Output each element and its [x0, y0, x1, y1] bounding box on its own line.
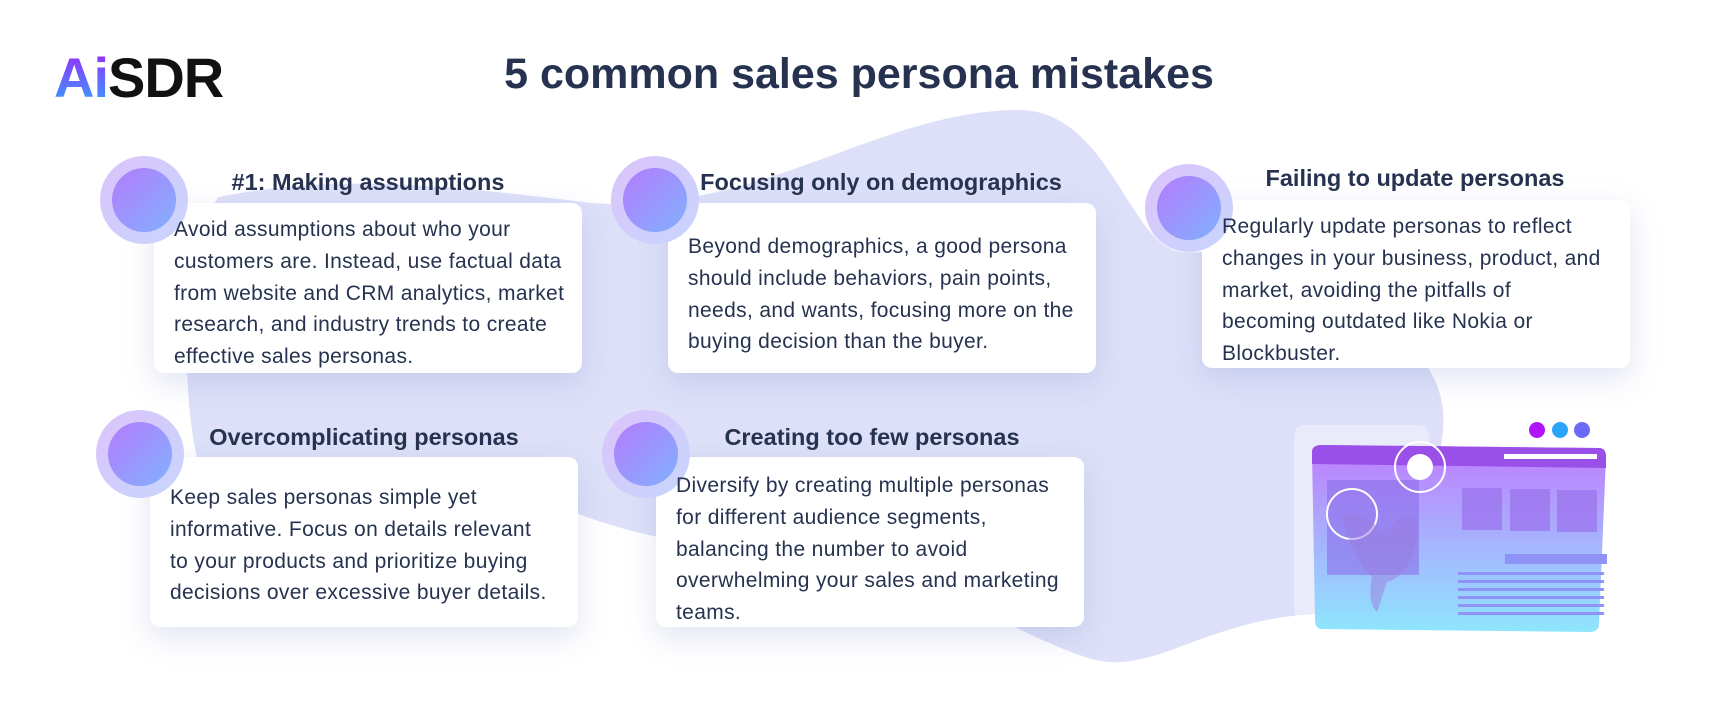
card 4 — [96, 410, 586, 646]
text 2: buying decision than the buyer. — [688, 330, 988, 353]
text 2: Beyond demographics, a good persona — [688, 235, 1067, 258]
text 3: market, avoiding the pitfalls of — [1222, 279, 1511, 302]
text 2: should include behaviors, pain points, — [688, 267, 1052, 290]
card 5 — [602, 410, 1090, 646]
text 4 — [170, 486, 547, 604]
text 2: needs, and wants, focusing more on the — [688, 299, 1074, 322]
card 3 — [1145, 164, 1638, 386]
card 1 — [100, 156, 588, 392]
text 4: Keep sales personas simple yet — [170, 486, 477, 509]
text 3: changes in your business, product, and — [1222, 247, 1601, 270]
text 5: balancing the number to avoid — [676, 538, 968, 561]
text 3: becoming outdated like Nokia or — [1222, 310, 1533, 333]
heading 5: Creating too few personas — [724, 424, 1020, 450]
text 4: informative. Focus on details relevant — [170, 518, 531, 541]
heading 2: Focusing only on demographics — [700, 169, 1062, 195]
icon circle 5 — [602, 410, 690, 498]
card box 4 — [150, 457, 578, 627]
text 1: effective sales personas. — [174, 345, 414, 368]
heading 1: #1: Making assumptions — [232, 169, 504, 195]
icon circle 3 — [1145, 164, 1233, 252]
text 5: teams. — [676, 601, 741, 624]
icon circle 1 — [100, 156, 188, 244]
window dots — [1529, 422, 1590, 438]
text 4: decisions over excessive buyer details. — [170, 581, 547, 604]
text 5 — [676, 474, 1059, 624]
text 3: Blockbuster. — [1222, 342, 1341, 365]
text 1: from website and CRM analytics, market — [174, 282, 564, 305]
icon circle 4 — [96, 410, 184, 498]
text 5: for different audience segments, — [676, 506, 987, 529]
logo: AiSDR — [54, 46, 223, 109]
card box 5 — [656, 457, 1084, 627]
heading 4: Overcomplicating personas — [209, 424, 519, 450]
card box 2 — [668, 203, 1096, 373]
heading 3: Failing to update personas — [1265, 165, 1565, 191]
text 1: research, and industry trends to create — [174, 313, 547, 336]
card box 3 — [1202, 200, 1630, 368]
text 1: Avoid assumptions about who your — [174, 218, 511, 241]
icon circle 2 — [611, 156, 699, 244]
text 1: customers are. Instead, use factual data — [174, 250, 562, 273]
illustration: browser window — [1294, 422, 1607, 632]
text 5: Diversify by creating multiple personas — [676, 474, 1049, 497]
title: 5 common sales persona mistakes — [504, 50, 1214, 98]
text 1 — [174, 218, 564, 368]
text 3: Regularly update personas to reflect — [1222, 215, 1572, 238]
text 3 — [1222, 215, 1601, 365]
text 2 — [688, 235, 1074, 353]
card 2 — [611, 156, 1102, 390]
text 5: overwhelming your sales and marketing — [676, 569, 1059, 592]
card box 1 — [154, 203, 582, 373]
text 4: to your products and prioritize buying — [170, 550, 528, 573]
